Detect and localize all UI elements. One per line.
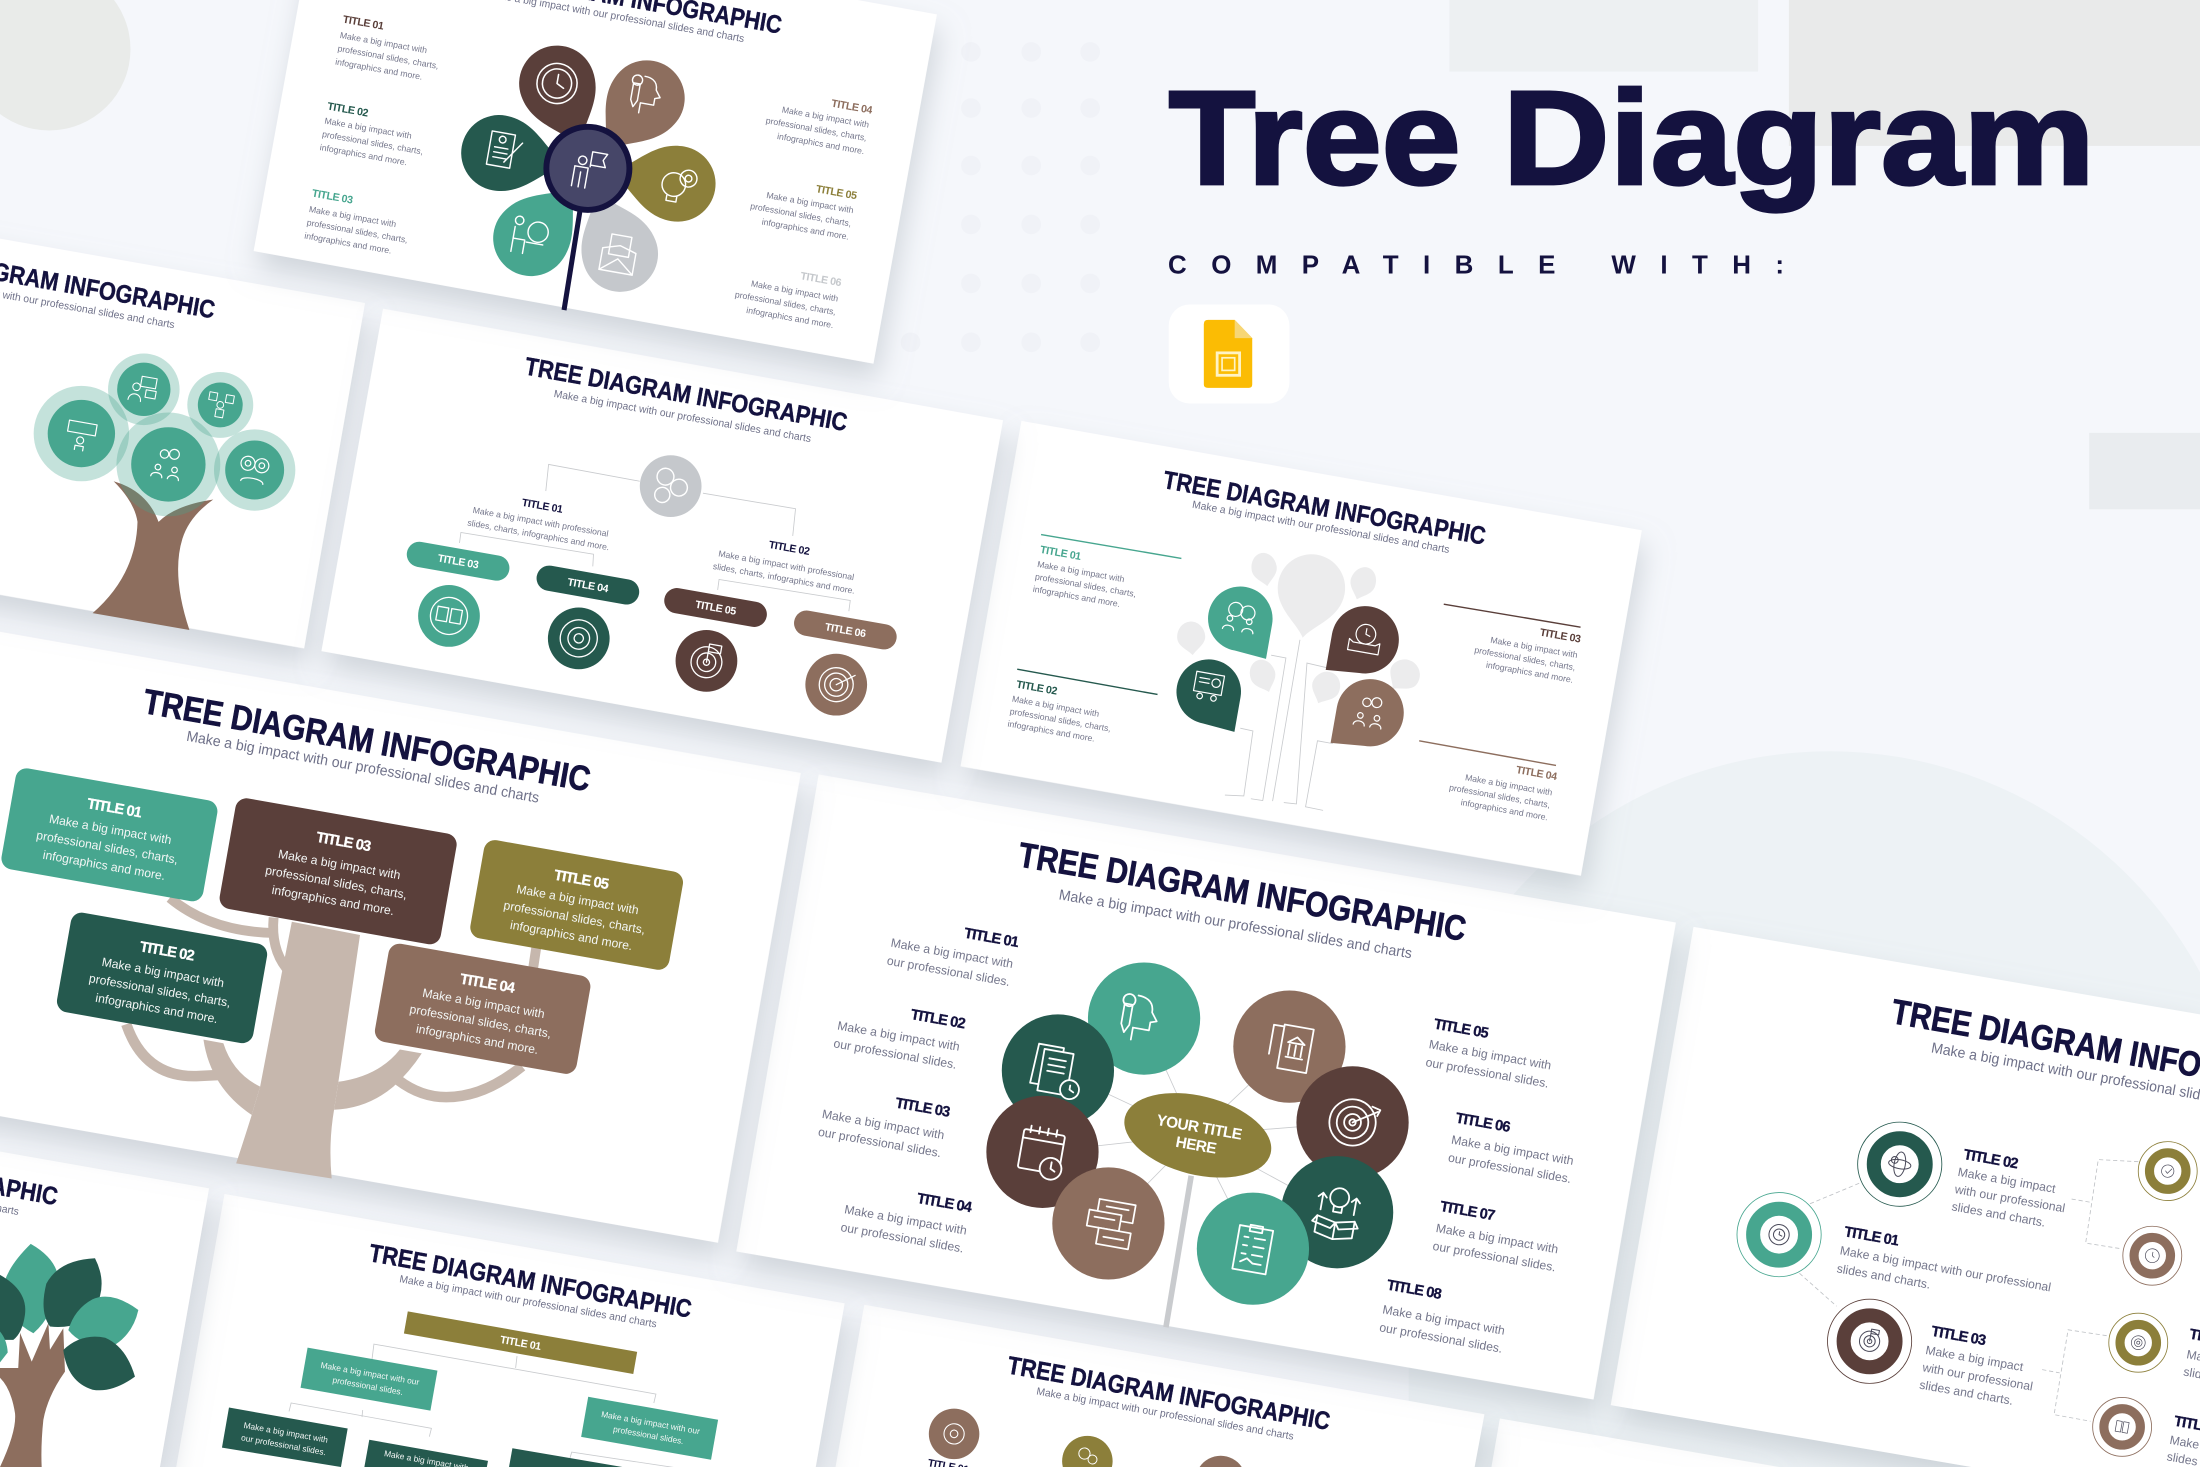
text: title 06: Make a big impact with: [750, 278, 839, 304]
compatible with label: COMPATIBLE WITH:: [1168, 252, 1784, 280]
text: title 01: [335, 14, 442, 84]
text: title 05: [747, 183, 858, 242]
text: title 03: Make a big impact with: [308, 204, 397, 229]
text: title 02: professional slides, charts,: [1009, 706, 1112, 734]
text: title 03: TITLE 03: [311, 188, 354, 207]
teal box right: [581, 1397, 718, 1460]
tree trunk: [93, 481, 213, 630]
box: title 01: [0, 767, 219, 903]
panel: circle cluster tree slide: [736, 774, 1676, 1400]
slide card: [736, 774, 1676, 1400]
slide card: [176, 1194, 845, 1467]
text: title 01: TITLE 01: [521, 497, 564, 516]
text: title 02: Make a big impact with: [324, 116, 413, 141]
olive bar: title 01: TITLE 01: [499, 1334, 542, 1353]
slide heading: TREE DIAGRAM INFOGRAPHIC: [1161, 466, 1488, 551]
text: title 01: slides and charts.: [1836, 1261, 1932, 1292]
text: title 02: infographics and more.: [319, 142, 408, 167]
circle: checklist icon: [1197, 1193, 1309, 1305]
text: title 02: with our professional: [1953, 1182, 2066, 1215]
teal box right: Make a big impact with our: [601, 1409, 701, 1436]
box: title 05: Make a big impact with: [515, 882, 640, 917]
slide subtitle: Make a big impact with our professional slides and charts: [1191, 499, 1450, 556]
slide card: [1611, 927, 2200, 1467]
text: title 04: professional slides, charts,: [1448, 782, 1551, 810]
crown circle: presentation: [34, 386, 129, 481]
text: title 02: [1007, 669, 1158, 746]
text: title 02: Make a big impact with: [836, 1019, 961, 1054]
box: title 03: infographics and more.: [271, 883, 395, 918]
text: title 04: Make a big impact with: [781, 104, 870, 130]
text: title 06: [2182, 1327, 2200, 1389]
panel: flower diagram slide: [254, 0, 937, 364]
box: title 04: professional slides, charts,: [408, 1002, 552, 1041]
icon: google slides: [1169, 304, 1289, 404]
text: title 03: infographics and more.: [304, 231, 392, 256]
title: Tree: [1169, 64, 1461, 213]
text: title 01: Make a big impact with: [339, 30, 428, 55]
petal: document: [455, 109, 572, 202]
text: title 01: Make a big impact with: [890, 936, 1014, 971]
green box 1: [222, 1408, 348, 1467]
text: title 01: [467, 497, 612, 552]
text: title 08: TITLE 08: [1386, 1278, 1443, 1303]
text: title 02: [319, 101, 426, 170]
node: title 02: [1858, 1122, 1942, 1206]
slide heading: TREE DIAGRAM INFOGRAPHIC: [1015, 836, 1469, 949]
text: title 06: infographics and more.: [746, 305, 834, 330]
stem: [564, 210, 580, 310]
central ellipse: your title here: YOUR TITLE: [1155, 1112, 1243, 1144]
text: title 02: [833, 1007, 967, 1072]
slide card: [0, 194, 365, 648]
panel: leafy tree slide: [0, 1127, 209, 1467]
pill: title 04: [535, 564, 641, 607]
text: title 03: TITLE 03: [1930, 1324, 1987, 1349]
olive bar: title 01: [404, 1311, 637, 1374]
text: title 02: slides, charts, infographics and more.: [712, 561, 856, 596]
pill: title 06: TITLE 06: [824, 621, 867, 640]
text: title 04: infographics and more.: [776, 131, 865, 156]
text: title 01: our professional slides.: [886, 954, 1011, 989]
tree trunk and branches: [126, 898, 537, 1179]
text: title 03: our professional slides.: [817, 1125, 942, 1160]
teal box right: professional slides.: [612, 1424, 685, 1446]
box: title 03: Make a big impact with: [277, 847, 402, 882]
text: title 01: infographics and more.: [1032, 584, 1121, 609]
panel: blank slide at bottom right: [1491, 1418, 1779, 1467]
text: title 02: TITLE 02: [1962, 1147, 2019, 1172]
text: title 04: professional slides, charts,: [765, 115, 868, 143]
text: title 08: our professional slides.: [1378, 1320, 1504, 1356]
box: title 03: [218, 797, 458, 946]
box: title 02: professional slides, charts,: [88, 971, 232, 1010]
icon: brown circle: [1200, 1456, 1242, 1467]
text: title 04: [763, 98, 873, 156]
text: title 02: professional slides, charts,: [321, 129, 424, 156]
slide card: [254, 0, 937, 364]
crown circle: network: [187, 372, 253, 438]
circle: target icon: [1296, 1066, 1409, 1179]
pill: title 04: TITLE 04: [566, 576, 609, 595]
text: title 03: [1444, 604, 1582, 685]
text: title 02: infographics and more.: [1007, 719, 1096, 744]
slide subtitle: Make a big impact with our professional slides and charts: [1036, 1386, 1295, 1443]
text: title 07: our professional slides.: [1432, 1239, 1557, 1274]
box: title 02: infographics and more.: [94, 991, 219, 1026]
text: title 06: [1447, 1111, 1575, 1186]
text: title 05: professional slides, charts,: [750, 201, 852, 228]
panel: green circle crown tree slide: [0, 194, 365, 648]
text: title 04: infographics and more.: [1460, 797, 1549, 822]
text: title 03: Make a big impact with: [821, 1107, 945, 1142]
flower center: person with flag: [546, 127, 629, 210]
node: title 03: [1827, 1299, 1912, 1383]
green box 1: Make a big impact with: [243, 1420, 329, 1445]
text: title 05: TITLE 05: [1433, 1017, 1490, 1042]
slide heading: TREE DIAGRAM INFOGRAPHIC: [367, 1239, 694, 1324]
text: title 05: Make a big impact with: [1428, 1037, 1552, 1073]
teal box left: Make a big impact with our: [320, 1360, 420, 1387]
green box 3: [509, 1448, 622, 1467]
box: title 02: TITLE 02: [138, 939, 196, 965]
node: brown level 2: [2123, 1226, 2182, 1285]
central ellipse: your title here: HERE: [1174, 1134, 1218, 1158]
text: title 04: [840, 1191, 974, 1256]
slide card: [0, 1149, 209, 1467]
drop: dark green presentation: [1171, 654, 1246, 732]
slide heading: TREE DIAGRAM INFOGRAPHIC: [140, 682, 593, 799]
pill: title 06: [792, 609, 899, 651]
box: title 04: [373, 942, 592, 1076]
text: title 02: [712, 539, 858, 596]
text: title 01: TITLE 01: [1039, 544, 1082, 563]
text: title 07: TITLE 07: [1439, 1199, 1496, 1224]
box: title 05: TITLE 05: [553, 868, 610, 893]
connector lines: [1042, 1020, 1353, 1249]
central ellipse: your title here: [1115, 1079, 1280, 1192]
circle: calendar icon: [986, 1096, 1099, 1208]
title: Diagram: [1503, 64, 2095, 213]
title: [1169, 64, 2095, 213]
text: title 02: Make a big impact: [1957, 1165, 2057, 1196]
connectors: [289, 1344, 712, 1467]
circle: box idea icon: [1281, 1156, 1393, 1268]
box: title 01: TITLE 01: [86, 796, 143, 821]
teal box left: [301, 1348, 437, 1411]
text: title 03: professional slides, charts,: [306, 217, 409, 245]
crown circle: gears: [214, 429, 295, 511]
panel: teardrop tree slide: [961, 421, 1642, 876]
text: title 04: TITLE 04: [1515, 764, 1558, 783]
box: title 05: infographics and more.: [509, 918, 634, 953]
text: title 01: Make a big impact with our professional: [1839, 1243, 2052, 1294]
text: title 02: [1950, 1147, 2069, 1233]
node: olive level 2 lower: [2109, 1313, 2168, 1372]
text: title 08: [1378, 1278, 1507, 1356]
slide card: [0, 624, 801, 1243]
slide card: [321, 309, 1003, 763]
text: title 01: professional slides, charts,: [337, 43, 439, 71]
text: title 02: Make a big impact with: [1011, 694, 1100, 719]
text: title 01: Make a big impact with: [1037, 559, 1125, 584]
panel: concentric circles tree slide: [1611, 927, 2200, 1467]
text: title 04: [1419, 741, 1558, 822]
box: title 01: infographics and more.: [42, 848, 166, 883]
tree leaves: [0, 1244, 138, 1390]
dashed connectors: [1799, 1160, 2138, 1421]
box: title 04: infographics and more.: [415, 1022, 540, 1057]
text: title 02: TITLE 02: [1015, 679, 1058, 698]
box: title 01: Make a big impact with: [48, 812, 173, 847]
circle: document clock icon: [1002, 1014, 1114, 1127]
panel: large tree with text boxes: [0, 624, 801, 1243]
text: title 02: TITLE 02: [909, 1007, 967, 1032]
text: title 01: [1032, 535, 1181, 611]
text: title 05: [1425, 1017, 1553, 1091]
slide subtitle: Make a big impact with our professional slides and charts: [399, 1273, 658, 1330]
text: title 03: Make a big impact with: [1490, 635, 1579, 660]
teal box left: professional slides.: [332, 1375, 404, 1397]
panel: org chart slide: [176, 1194, 845, 1467]
text: title 01: infographics and more.: [335, 57, 423, 82]
text: title 04: Make a big impact with: [843, 1202, 968, 1238]
text: title 05: TITLE 05: [815, 183, 858, 202]
text: title 07: Make a big impact with: [1435, 1221, 1559, 1256]
petal: person at desk: [478, 163, 604, 292]
text: title 07: [2166, 1414, 2200, 1467]
icon: brown flag target circle: [676, 630, 737, 692]
panel: org tree with pills slide: [321, 309, 1003, 763]
text: title 04: TITLE 04: [830, 98, 873, 117]
icon: teal circle: [418, 585, 480, 647]
text: title 02: slides and charts.: [1951, 1199, 2046, 1230]
icon: idea circle: [1062, 1436, 1113, 1467]
text: title 05: Make a big impact with: [766, 190, 855, 215]
pill: title 05: [662, 586, 769, 629]
icon: green gear circle: [548, 608, 610, 669]
green box 1: our professional slides.: [240, 1432, 327, 1457]
text: title 03: with our professional: [1920, 1360, 2034, 1394]
text: title 03: slides and charts.: [1918, 1378, 2014, 1408]
node: title 01: [1737, 1193, 1821, 1277]
slide subtitle: Make a big impact with our professional slides and charts: [185, 729, 540, 807]
petal: mail: [561, 177, 669, 303]
thin trunk lines: [1225, 640, 1333, 810]
text: title 06: Make a big impact with: [1450, 1133, 1575, 1168]
text: title 07: [1432, 1199, 1560, 1274]
box: title 03: professional slides, charts,: [264, 863, 408, 902]
petal: bulb and gear: [605, 135, 722, 228]
panel: round icons slide at bottom: [836, 1305, 1484, 1467]
text: title 03: [817, 1096, 951, 1160]
text: title 01: Make a big impact with professional: [472, 505, 609, 539]
slide subtitle: Make a big impact with our professional slides and charts: [1058, 887, 1413, 962]
slide card: [961, 421, 1642, 876]
text: title 01: TITLE 01: [342, 14, 385, 33]
text: title 06: [732, 270, 842, 330]
text: title 01: TITLE 01: [963, 926, 1020, 951]
box: title 03: TITLE 03: [315, 830, 372, 855]
box: title 05: [469, 838, 685, 972]
text: title 04: TITLE 04: [916, 1191, 974, 1216]
pill: title 05: TITLE 05: [694, 599, 737, 618]
circle: head icon: [1088, 962, 1200, 1075]
box: title 04: Make a big impact with: [421, 986, 546, 1021]
node: olive level 2: [2138, 1142, 2197, 1201]
pill: title 03: TITLE 03: [437, 553, 480, 572]
text: title 04: Make a big impact with: [1464, 772, 1553, 798]
slide heading: TREE DIAGRAM INFOGRAPHIC: [523, 353, 849, 437]
grey background drops: [1176, 549, 1426, 709]
slide card: [836, 1305, 1484, 1467]
green box 2: [364, 1440, 488, 1467]
icon: gear circle: [929, 1409, 979, 1459]
text: title 01: TITLE 01: [1843, 1224, 1900, 1250]
text: title 01: slides, charts, infographics and more.: [467, 517, 610, 552]
text: title 05: our professional slides.: [1425, 1055, 1550, 1091]
text: title 01: professional slides, charts,: [1034, 571, 1137, 599]
text: title 03: [1917, 1324, 2037, 1411]
text: title 03: TITLE 03: [1539, 627, 1582, 646]
petal: head with pencil: [575, 45, 700, 174]
drop: teal gears: [1202, 581, 1278, 659]
text: title 03: infographics and more.: [1485, 660, 1574, 685]
text: title 02: TITLE 02: [768, 539, 811, 558]
crown circle: discussion: [108, 354, 180, 425]
tree stem: [1166, 1176, 1191, 1327]
text: title 06: TITLE 06: [799, 270, 842, 289]
text: title 06: professional slides, charts,: [734, 289, 837, 317]
text: title 06: our professional slides.: [1447, 1151, 1572, 1186]
tree trunk: [0, 1323, 65, 1467]
circle: chat icon: [1052, 1167, 1165, 1280]
circle: bank document icon: [1233, 991, 1346, 1103]
text: title 03: [304, 188, 411, 258]
text: title 02: Make a big impact with professional: [718, 548, 855, 582]
text: title 03: TITLE 03: [894, 1096, 951, 1121]
box: title 05: professional slides, charts,: [502, 898, 646, 937]
drop: light brown people: [1331, 674, 1409, 755]
petal: clock: [508, 35, 616, 160]
node: brown level 2 lower: [2093, 1397, 2152, 1456]
crown circle: people ideas: [116, 412, 220, 516]
text: title 03: Make a big impact: [1924, 1343, 2025, 1374]
connectors: [460, 464, 850, 611]
box: title 04: TITLE 04: [459, 971, 517, 997]
icon: target circle: [805, 654, 867, 716]
text: title 02: TITLE 02: [326, 101, 369, 120]
text: title 05: infographics and more.: [761, 217, 850, 242]
slide subtitle: Make a big impact with our professional slides and charts: [553, 388, 812, 445]
drop: dark brown clock: [1326, 601, 1404, 682]
text: title 02: our professional slides.: [833, 1036, 958, 1072]
text: title 08: Make a big impact with: [1381, 1302, 1506, 1338]
box: title 02: [55, 911, 269, 1045]
pill: title 03: [405, 540, 511, 583]
text: title 01: [886, 926, 1020, 989]
text: title 06: TITLE 06: [1454, 1111, 1511, 1136]
text: title 03: professional slides, charts,: [1474, 645, 1576, 672]
icon: root gears: [640, 455, 702, 517]
slide heading: TREE DIAGRAM INFOGRAPHIC: [1005, 1352, 1332, 1436]
box: title 01: professional slides, charts,: [35, 828, 179, 867]
box: title 02: Make a big impact with: [101, 955, 225, 990]
text: title 04: our professional slides.: [840, 1220, 965, 1256]
text: title 01: [1836, 1224, 2052, 1312]
